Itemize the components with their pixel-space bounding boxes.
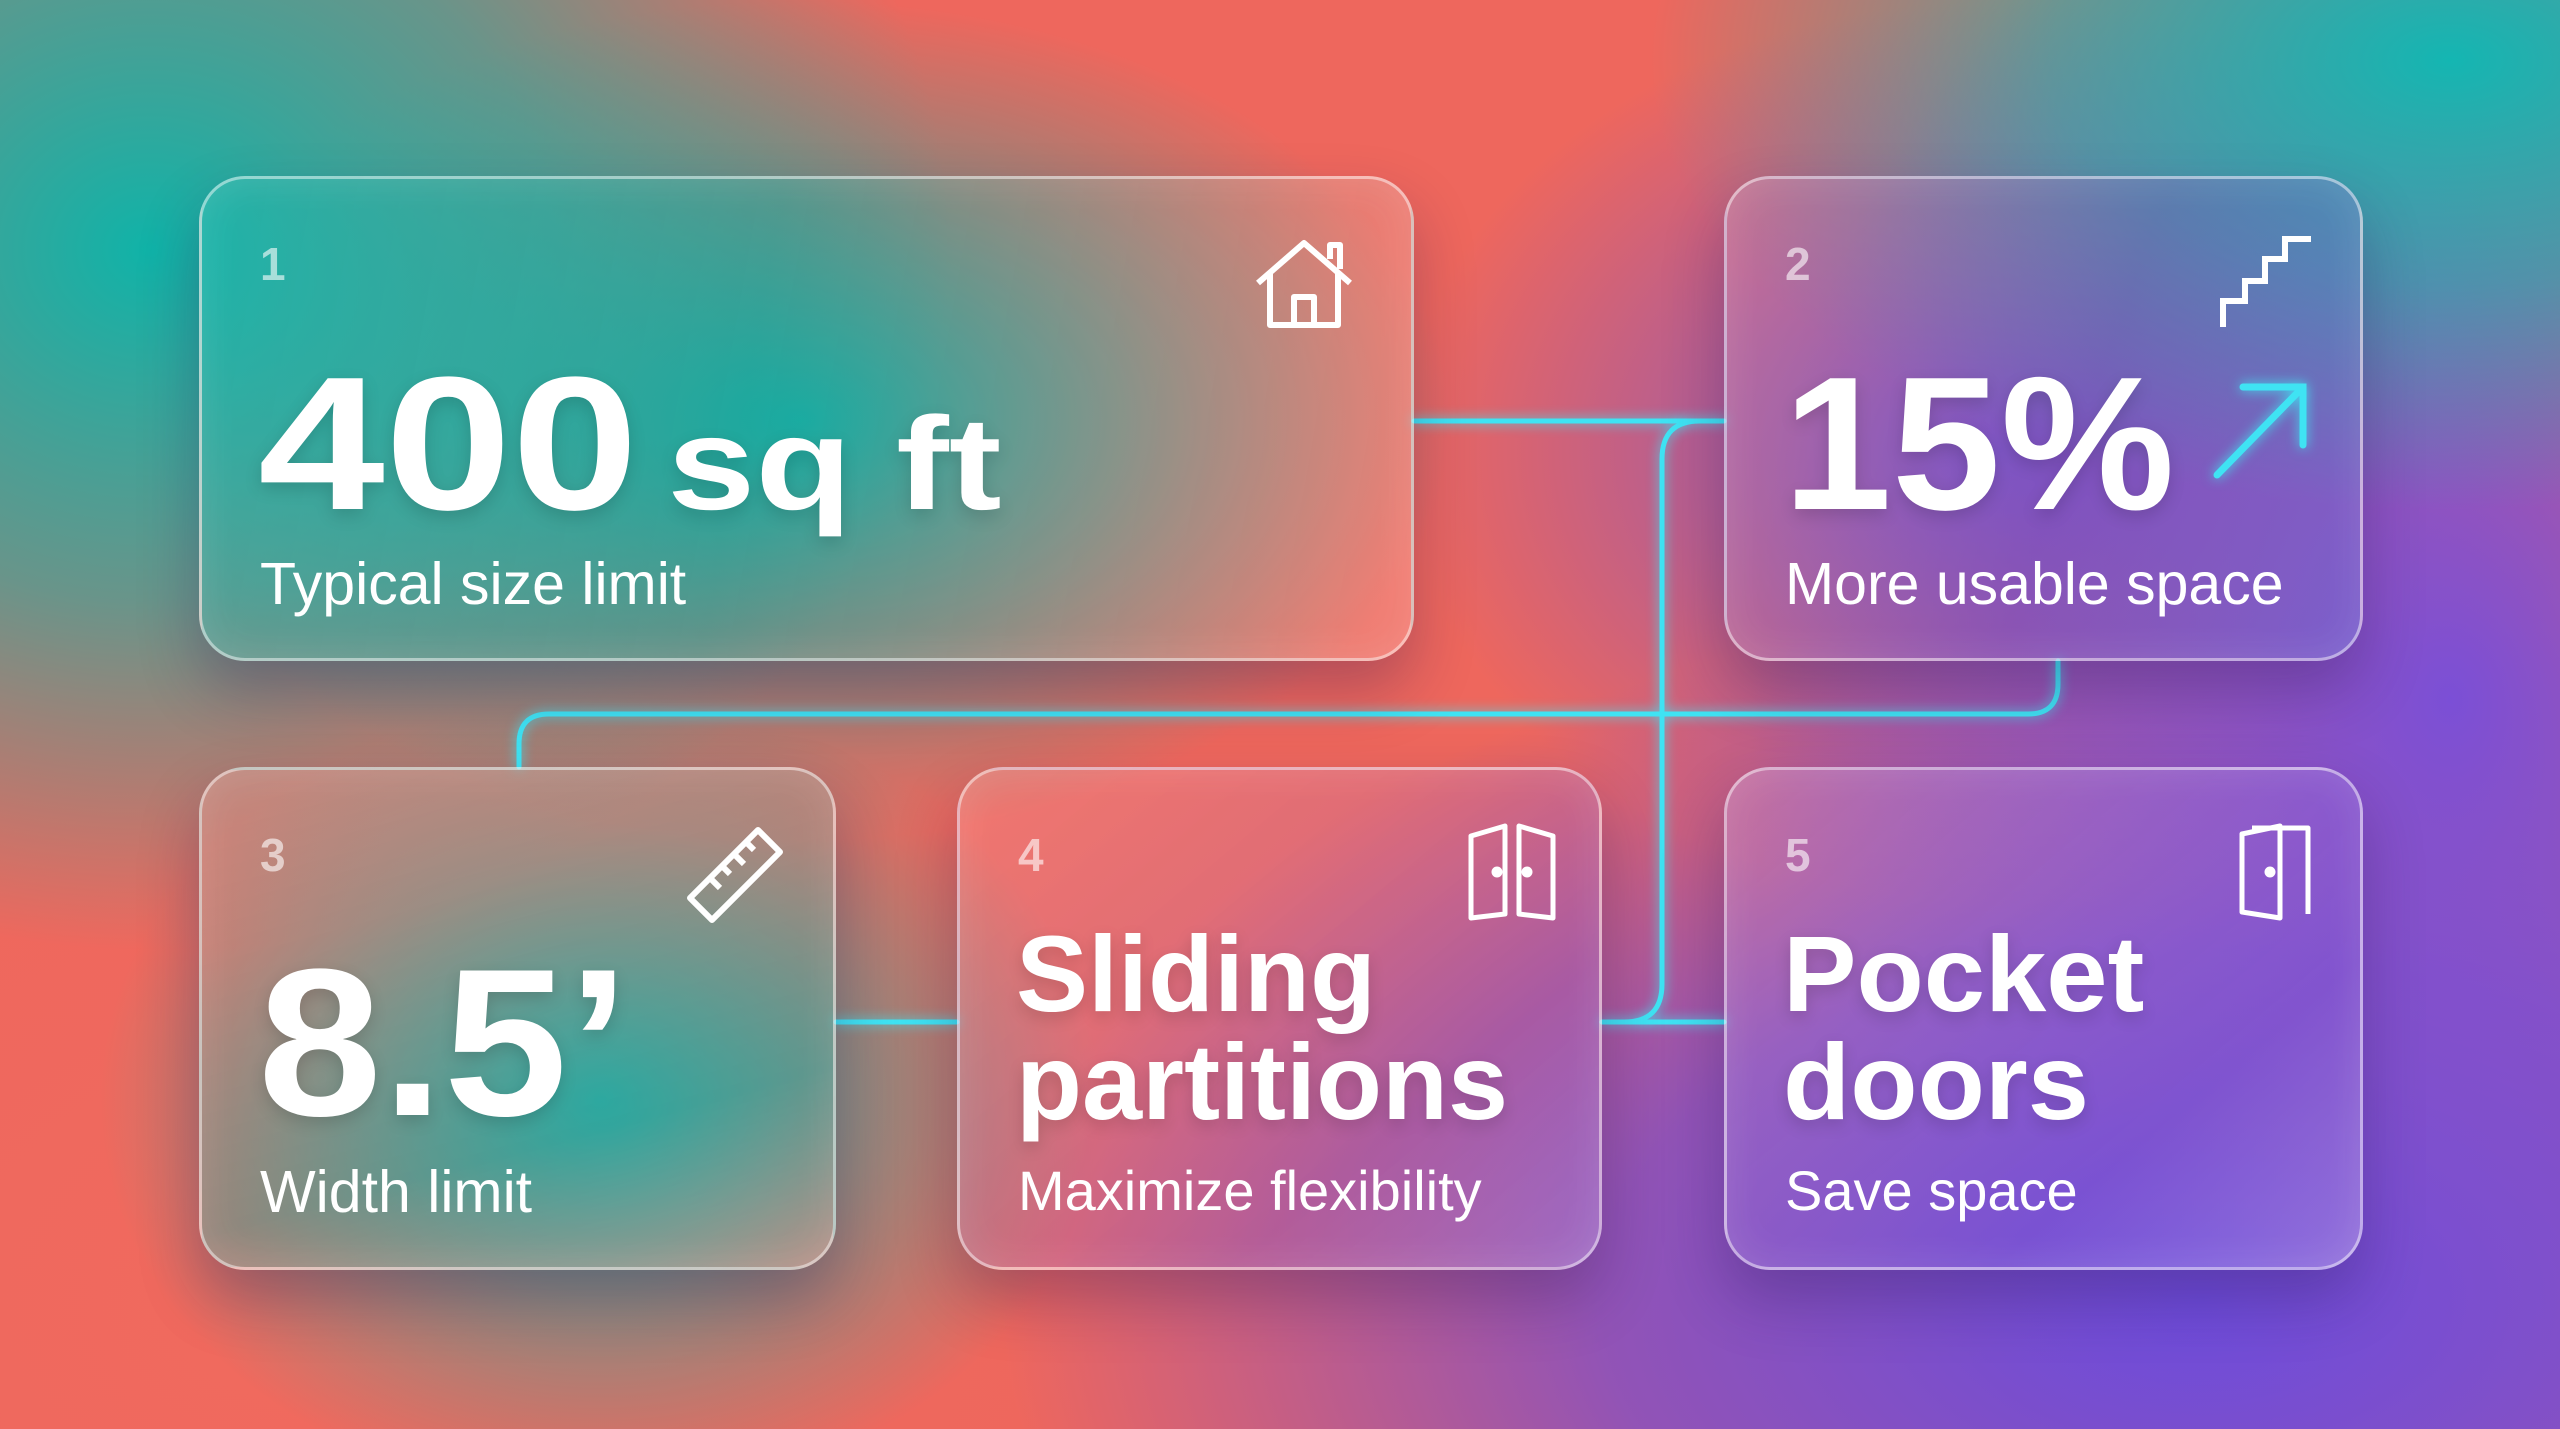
icon: ruler bbox=[687, 827, 783, 923]
card 4: sliding partitions: 4 bbox=[1018, 829, 1044, 881]
heading: sliding partitions: partitions bbox=[1016, 1021, 1508, 1142]
card 2: 15%: More usable space bbox=[1785, 551, 2284, 617]
card 2: 15% bbox=[1724, 176, 2363, 661]
heading: pocket doors: Pocket bbox=[1783, 913, 2144, 1034]
card 3: 8.5' bbox=[199, 767, 836, 1270]
icon: sliding doors bbox=[1468, 824, 1556, 920]
card 1: 400 sq ft: Typical size limit bbox=[260, 551, 686, 617]
card 3: 8.5': 8.5’ bbox=[258, 925, 629, 1160]
heading: pocket doors: doors bbox=[1783, 1021, 2089, 1142]
card 4: sliding partitions bbox=[957, 767, 1602, 1270]
card 4: sliding partitions: Maximize flexibility bbox=[1018, 1159, 1482, 1222]
card 5: pocket doors: Save space bbox=[1785, 1159, 2078, 1222]
heading: pocket doors bbox=[1783, 913, 2144, 1142]
heading: sliding partitions: Sliding bbox=[1016, 913, 1376, 1034]
card 5: pocket doors bbox=[1724, 767, 2363, 1270]
card 1: 400 sq ft: 1 bbox=[260, 238, 286, 290]
card 2: 15%: 15% bbox=[1783, 338, 2175, 550]
icon: arrow up bbox=[2208, 375, 2315, 484]
card 5: pocket doors: 5 bbox=[1785, 829, 1811, 881]
card 3: 8.5': Width limit bbox=[260, 1159, 532, 1225]
card 2: 15%: 2 bbox=[1785, 238, 1811, 290]
heading: sliding partitions bbox=[1016, 913, 1508, 1148]
card 3: 8.5': 3 bbox=[260, 829, 286, 881]
card 1: 400 sq ft bbox=[199, 176, 1414, 661]
icon: house bbox=[1256, 240, 1352, 328]
icon: door bbox=[2240, 824, 2310, 920]
card 1: 400 sq ft: 400sq ft bbox=[258, 338, 1002, 550]
icon: stairs bbox=[2220, 236, 2311, 327]
